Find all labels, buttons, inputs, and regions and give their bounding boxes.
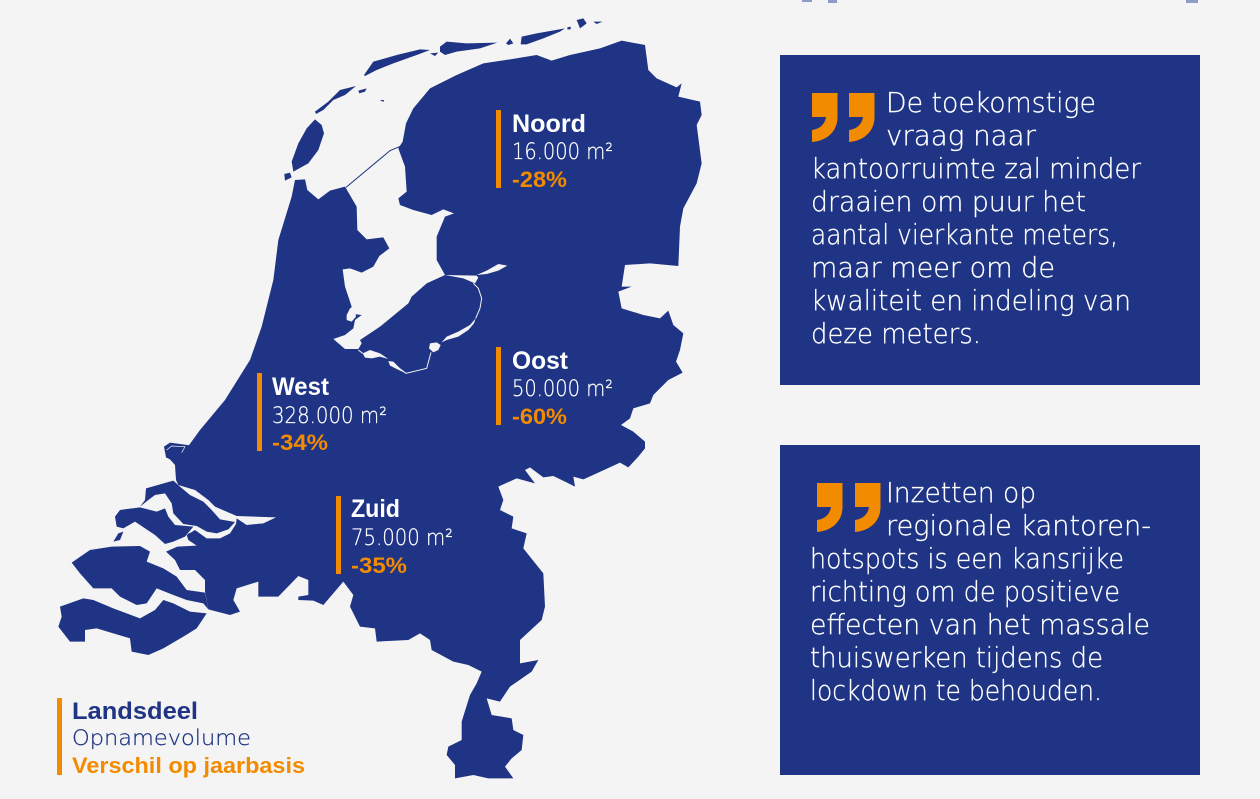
- legend: Landsdeel: [72, 698, 198, 725]
- quote text: vraag naar: [886, 119, 1036, 152]
- quote text: [810, 476, 1151, 707]
- Texel: [292, 119, 324, 172]
- quote text: thuiswerken tijdens de: [810, 641, 1103, 674]
- quote text: hotspots is een kansrijke: [810, 542, 1124, 575]
- icon: quotation mark: [817, 483, 880, 532]
- Afsluitdijk: [346, 145, 403, 187]
- label: Noord: Noord: [512, 110, 586, 138]
- label: Noord: 16.000 m²: [512, 140, 613, 165]
- quote text: richting om de positieve: [810, 575, 1120, 608]
- label: West: [257, 373, 387, 455]
- label: Zuid: 75.000 m²: [351, 526, 453, 551]
- legend: Verschil op jaarbasis: [72, 753, 305, 778]
- Terschelling: [364, 49, 430, 76]
- quote text: kantoorruimte zal minder: [811, 152, 1141, 185]
- quote text: kwaliteit en indeling van: [811, 284, 1131, 317]
- label: Noord: -28%: [512, 167, 567, 192]
- Sint Philipsland: [188, 532, 200, 538]
- label: Zuid: -35%: [351, 553, 407, 578]
- label: Oost: -60%: [512, 404, 567, 429]
- mainland: [164, 41, 702, 778]
- quote text: lockdown te behouden.: [810, 674, 1102, 707]
- Vlieland islet: [358, 88, 367, 93]
- quote text: regionale kantoren-: [886, 509, 1151, 542]
- Ameland: [440, 42, 497, 55]
- label: Oost: [496, 347, 613, 429]
- quote text: effecten van het massale: [810, 608, 1150, 641]
- cropped logo remnants at top edge: [802, 0, 1198, 3]
- label: Oost: Oost: [512, 347, 569, 375]
- label: West: -34%: [272, 430, 328, 455]
- Schiermonnikoog: [521, 28, 565, 44]
- accent bar: [496, 110, 501, 188]
- Walcheren and Zuid-Beveland: [72, 546, 208, 609]
- label: Oost: 50.000 m²: [512, 377, 613, 402]
- Texel tip: [284, 173, 292, 181]
- accent bar: [336, 496, 341, 574]
- legend: [57, 698, 305, 778]
- Zeeuws-Vlaanderen: [58, 598, 207, 655]
- quote text: [811, 86, 1141, 350]
- quote text: aantal vierkante meters,: [811, 218, 1118, 251]
- panel: quote 1: [780, 55, 1200, 385]
- map: Netherlands: [58, 18, 702, 778]
- Schouwen-Duiveland: [115, 507, 193, 544]
- panel: quote 2: [780, 445, 1200, 775]
- quote text: De toekomstige: [886, 86, 1096, 119]
- label: West: 328.000 m²: [272, 404, 387, 429]
- icon: quotation mark: [812, 93, 874, 142]
- Vlieland: [315, 86, 356, 114]
- quote text: Inzetten op: [886, 476, 1036, 509]
- accent bar: [496, 347, 501, 425]
- label: West: West: [272, 373, 330, 401]
- label: Noord: [496, 110, 613, 192]
- label: Zuid: [336, 495, 453, 578]
- label: Zuid: Zuid: [351, 495, 400, 523]
- small Wadden islets: [380, 18, 603, 102]
- quote text: maar meer om de: [811, 251, 1055, 284]
- quote text: draaien om puur het: [811, 185, 1086, 218]
- quote text: deze meters.: [811, 317, 981, 350]
- Neeltje Jans: [113, 532, 123, 542]
- Goeree-Overflakkee: [140, 481, 235, 533]
- legend: Opnamevolume: [72, 726, 251, 750]
- water: randmeren around Flevoland: [167, 264, 507, 453]
- accent bar: [257, 373, 262, 451]
- accent bar: [57, 698, 62, 775]
